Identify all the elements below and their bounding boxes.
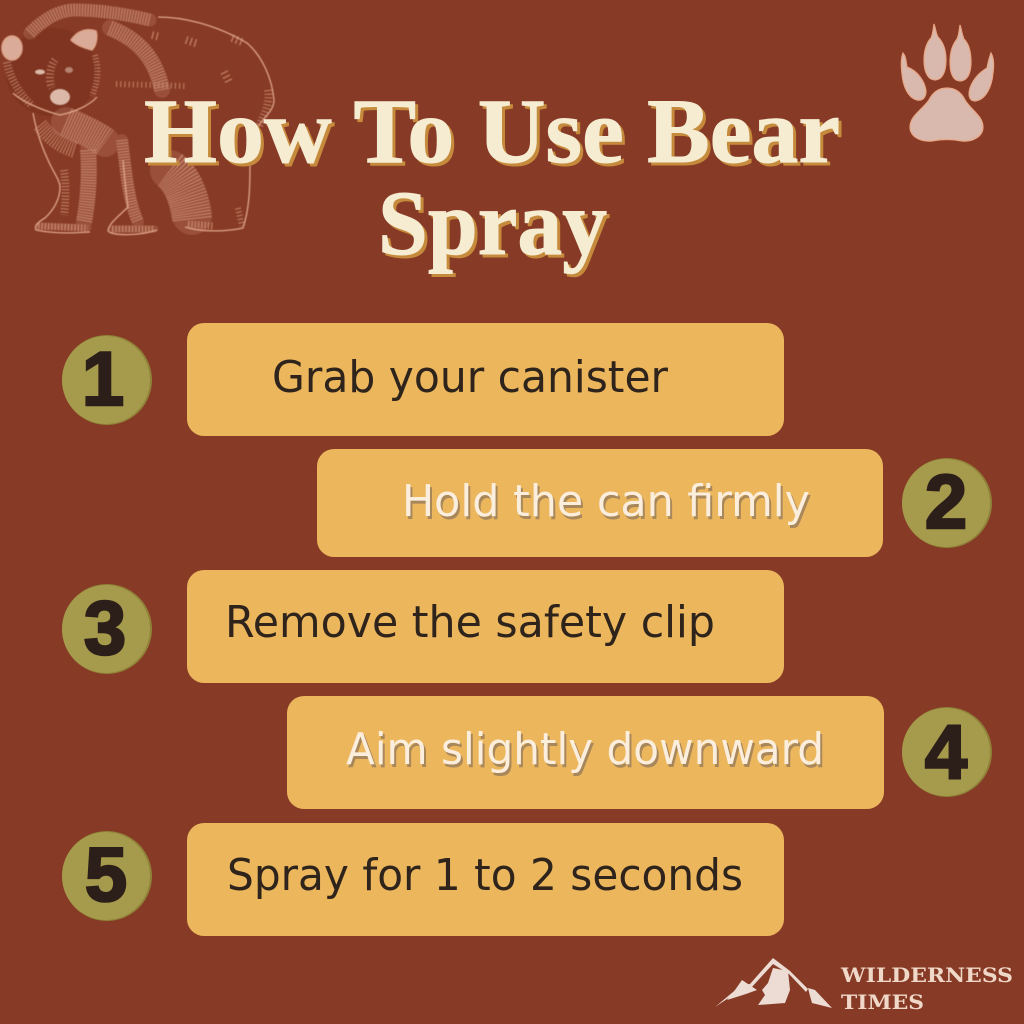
step bar 2 bbox=[317, 449, 883, 557]
step bar 1 bbox=[187, 323, 784, 436]
step bar 4: Aim slightly downward bbox=[346, 724, 824, 775]
step bar 3: Remove the safety clip bbox=[225, 597, 715, 648]
number badge 4: 4 bbox=[925, 710, 967, 795]
number badge 5: 5 bbox=[85, 833, 127, 918]
wordmark: TIMES bbox=[841, 990, 924, 1014]
step bar 2: Hold the can firmly bbox=[402, 476, 810, 527]
title bbox=[144, 80, 840, 274]
number badge 1 bbox=[62, 335, 152, 425]
icon: mountains bbox=[715, 958, 832, 1008]
number badge 2 bbox=[902, 458, 992, 548]
step bar 4 bbox=[287, 696, 884, 809]
number badge 3 bbox=[62, 584, 152, 674]
wordmark bbox=[840, 963, 1013, 1014]
step 1 bbox=[62, 323, 784, 436]
number badge 2: 2 bbox=[925, 460, 967, 545]
step bar 5 bbox=[187, 823, 784, 936]
icon: bear sketch bbox=[2, 10, 274, 235]
step 4 bbox=[287, 696, 992, 809]
title: How To Use Bear bbox=[144, 80, 840, 182]
icon: bear ears bbox=[2, 30, 97, 60]
wordmark: WILDERNESS bbox=[840, 963, 1013, 987]
step 2 bbox=[317, 449, 992, 557]
step bar 5: Spray for 1 to 2 seconds bbox=[227, 850, 743, 901]
number badge 4 bbox=[902, 707, 992, 797]
title: Spray bbox=[378, 172, 607, 274]
number badge 1: 1 bbox=[82, 337, 124, 422]
logo: Wilderness Times bbox=[715, 958, 1013, 1014]
step bar 3 bbox=[187, 570, 784, 683]
icon: bear nose and eye bbox=[35, 67, 73, 105]
step 5 bbox=[62, 823, 784, 936]
icon: paw print bbox=[901, 24, 994, 141]
step bar 1: Grab your canister bbox=[272, 352, 669, 403]
number badge 3: 3 bbox=[84, 586, 126, 671]
step 3 bbox=[62, 570, 784, 683]
number badge 5 bbox=[62, 831, 152, 921]
